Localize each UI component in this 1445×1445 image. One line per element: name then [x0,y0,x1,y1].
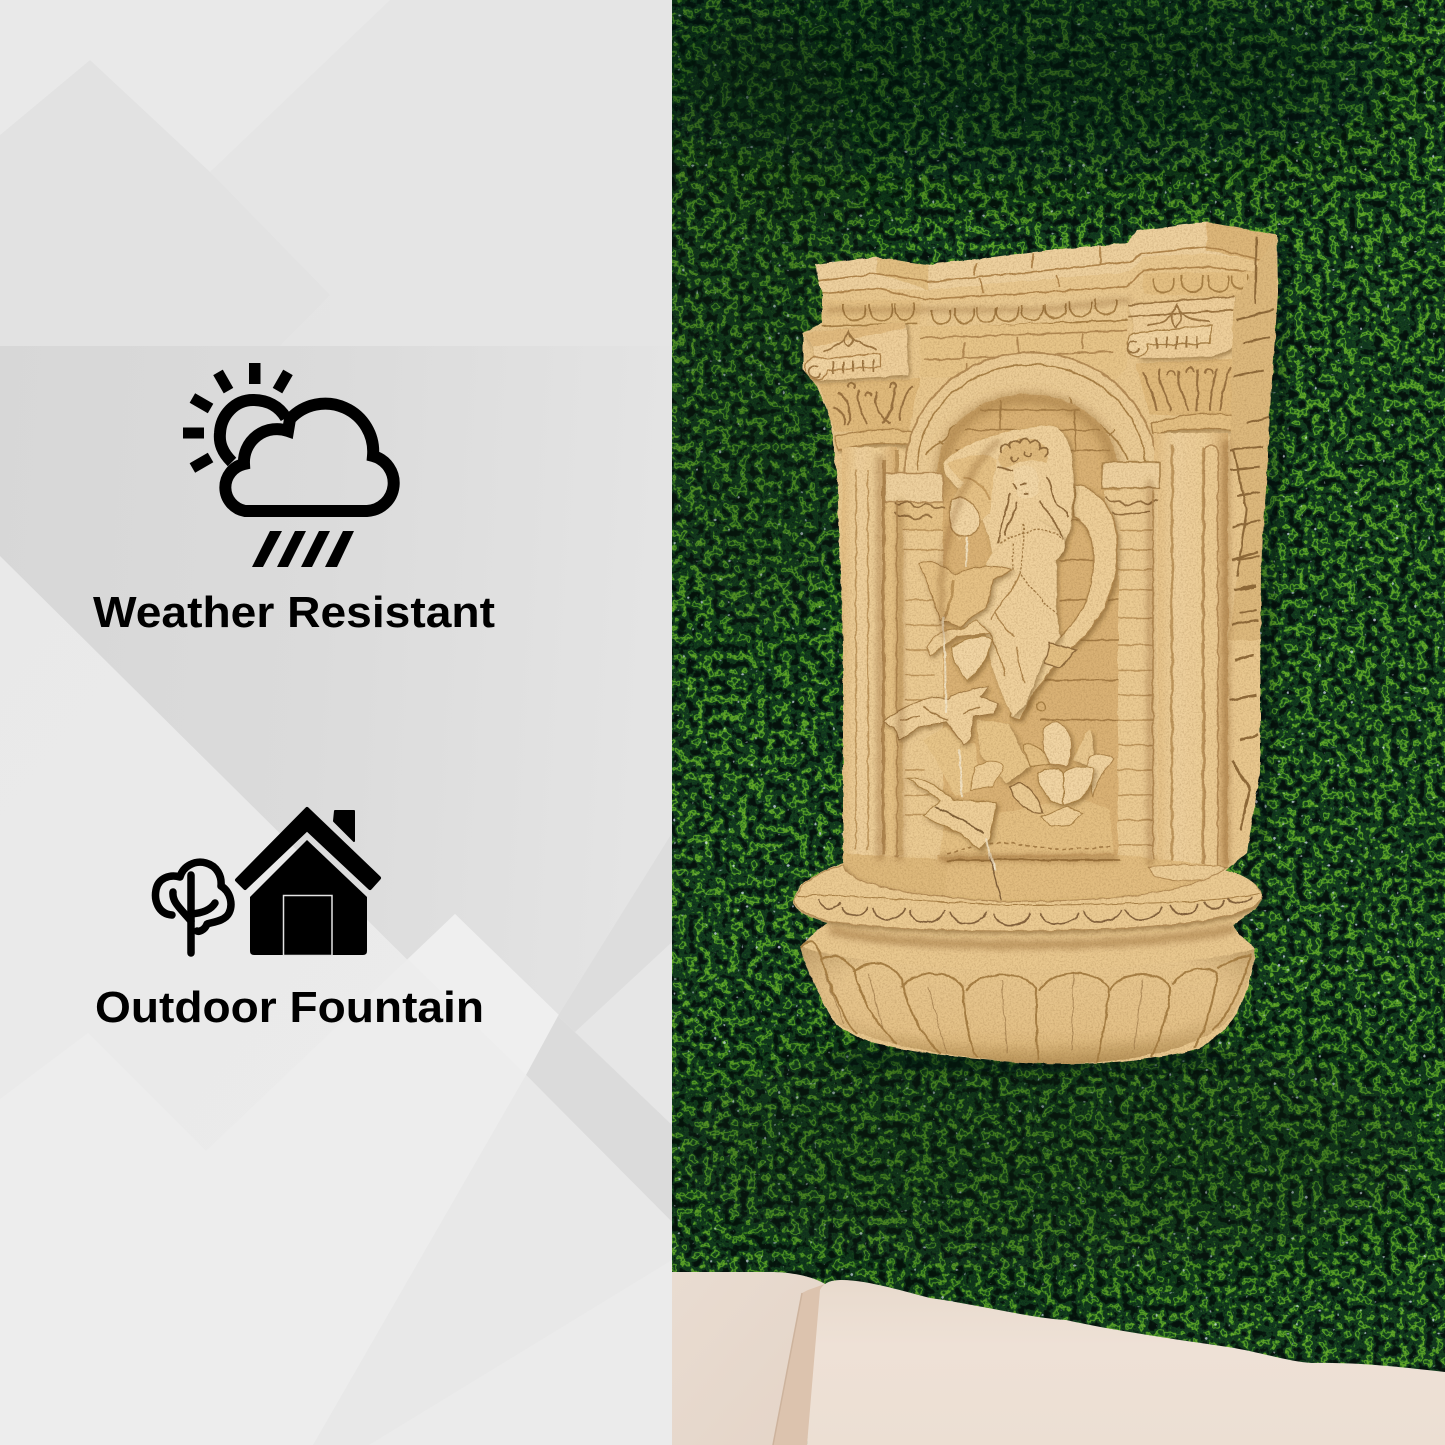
basin and bowl [793,853,1263,1064]
panel: grey geometric background [0,0,672,1445]
heading: Outdoor Fountain: Outdoor Fountain [95,983,484,1032]
photo: green boxwood hedge [600,0,1445,1445]
columns and pilasters [842,433,1228,873]
arch and niche [905,352,1157,860]
icon: tree and house [156,809,379,956]
figure: woman pouring water with lilies [883,426,1117,868]
left capital [818,378,920,432]
photo: wall fountain sculpture [780,210,1290,1080]
rough right return of wall [1228,235,1277,640]
heading: Weather Resistant: Weather Resistant [93,588,495,637]
water streams [943,537,992,868]
entablature and capitals [803,222,1277,640]
photo: beige sofa cushions [672,1272,1445,1445]
icon: sun, cloud and rain [183,363,394,567]
soft shading on stone [826,300,1235,945]
rough bricks on right return [1230,552,1258,830]
right capital [1136,358,1233,416]
